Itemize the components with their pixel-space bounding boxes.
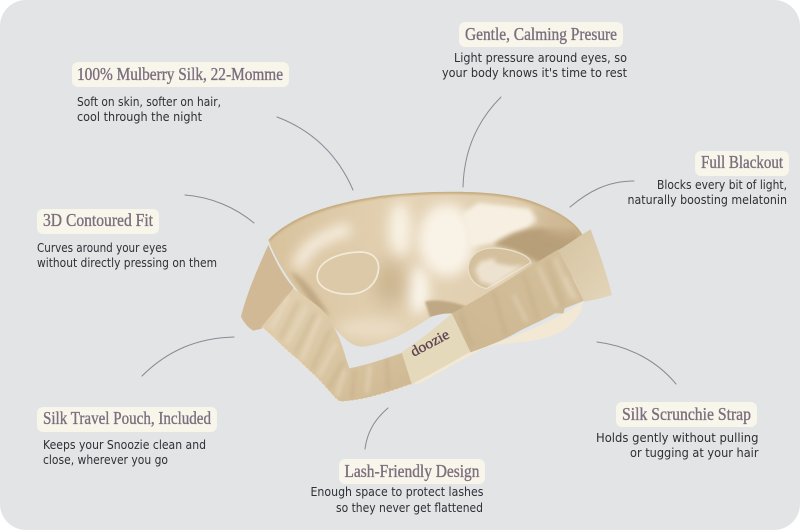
arrow: mulberry silk leader (277, 117, 353, 190)
callout: Full Blackout: Full Blackout (701, 152, 783, 172)
callout: Silk Scrunchie Strap: or tugging at your hair (630, 446, 759, 460)
callout: 3D Contoured Fit: 3D Contoured Fit (43, 210, 153, 230)
callout: Silk Scrunchie Strap: Holds gently without pulling (596, 431, 758, 445)
callout: 3D Contoured Fit (37, 209, 217, 270)
right eye cup (468, 248, 531, 289)
callout: Silk Travel Pouch (37, 407, 217, 467)
right scrunchie strap (452, 249, 584, 352)
callout: Full Blackout (628, 151, 789, 207)
left eye cup (317, 252, 379, 294)
right side panel (558, 229, 612, 302)
arrow: contoured fit leader (185, 195, 254, 223)
callout: Silk Travel Pouch: close, wherever you go (43, 453, 168, 467)
callout: Gentle, Calming Presure (442, 22, 627, 80)
callout: Silk Scrunchie Strap (596, 402, 759, 460)
callout: Lash-Friendly Design: Lash-Friendly Design (344, 461, 480, 481)
callout: Silk Travel Pouch: Keeps your Snoozie clean and (43, 438, 206, 452)
arrow: full blackout leader (570, 181, 634, 207)
callout: Full Blackout: Blocks every bit of light, (657, 178, 787, 192)
callout: Gentle, Calming Presure: Light pressure around eyes, so (454, 51, 627, 65)
mask back lining (410, 302, 583, 385)
left side panel (241, 245, 293, 331)
callout: 3D Contoured Fit: without directly pressing on them (37, 256, 217, 270)
callout: Lash-Friendly Design: Enough space to protect lashes (310, 485, 484, 499)
arrow: travel pouch leader (142, 337, 234, 376)
callout: 100% Mulberry Silk: 100% Mulberry Silk, 22-Momme (77, 64, 283, 84)
callout: Full Blackout: naturally boosting melatonin (628, 193, 787, 207)
ruffled strap edge (262, 327, 412, 402)
callout: Lash-Friendly Design (310, 459, 485, 515)
silk sleep mask illustration (241, 187, 612, 402)
arrow: lash-friendly leader (365, 408, 388, 449)
callout: Lash-Friendly Design: so they never get flattened (336, 501, 483, 515)
callout: Gentle, Calming Presure: your body knows it's time to rest (442, 66, 627, 80)
top edge piping (268, 192, 583, 240)
callout: Silk Travel Pouch: Silk Travel Pouch, Included (43, 408, 211, 428)
callout: 100% Mulberry Silk (72, 62, 289, 124)
callout: Gentle, Calming Presure: Gentle, Calming Presure (465, 24, 617, 44)
callout: 3D Contoured Fit: Curves around your eyes (37, 241, 167, 255)
arrow: scrunchie strap leader (597, 342, 676, 384)
callout: 100% Mulberry Silk: Soft on skin, softer on hair, (77, 95, 221, 109)
callout: Silk Scrunchie Strap: Silk Scrunchie Strap (622, 404, 751, 424)
strap logo tab (402, 314, 471, 384)
doozie logo: doozie (408, 327, 452, 360)
left scrunchie strap (262, 288, 412, 402)
arrow: calming pressure leader (463, 97, 501, 187)
mask silk body (268, 192, 582, 347)
callout: 100% Mulberry Silk: cool through the night (77, 110, 202, 124)
